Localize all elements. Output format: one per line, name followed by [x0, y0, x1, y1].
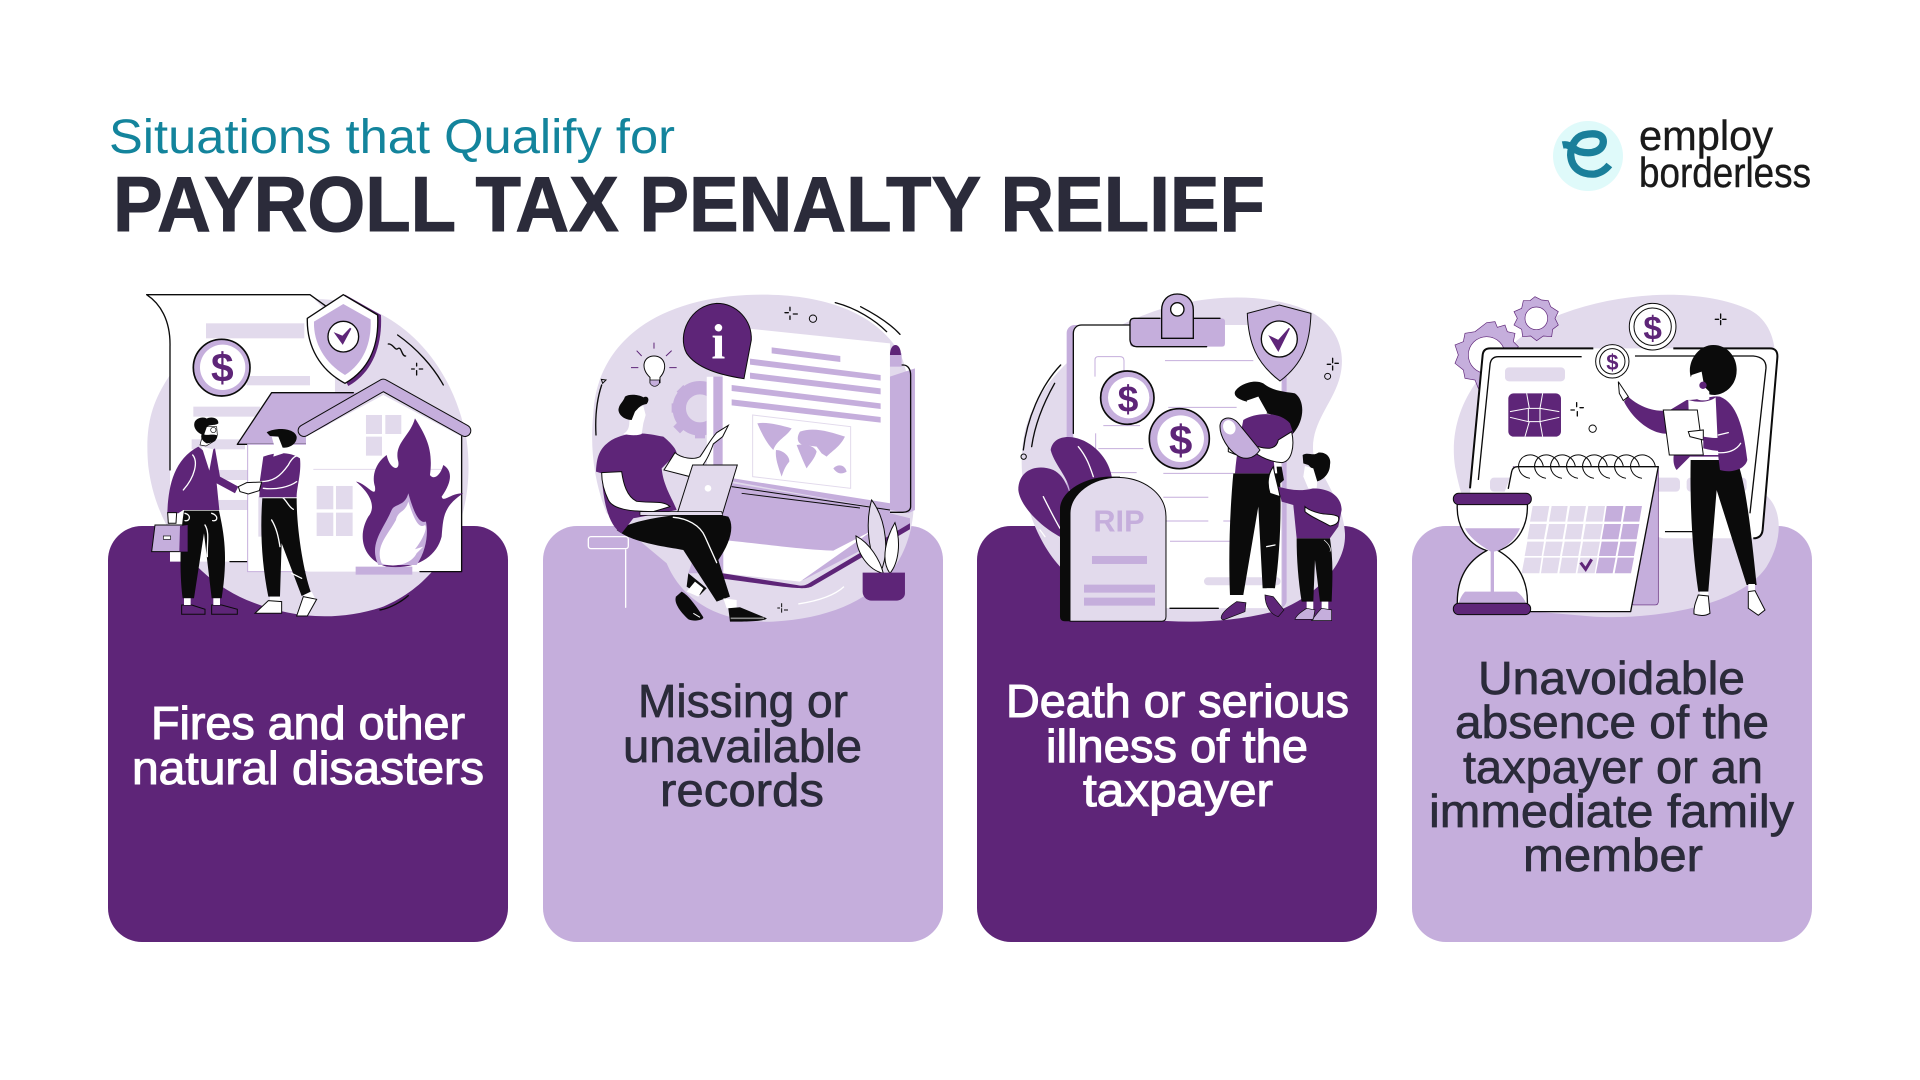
lightbulb [631, 343, 677, 386]
panel: death or serious illness [977, 294, 1377, 942]
card text: taxpayer [1083, 764, 1273, 816]
card text: immediate family [1429, 785, 1794, 837]
card text: taxpayer or an [1463, 741, 1763, 793]
house [237, 385, 465, 572]
illustration: person with laptop and document [588, 295, 915, 622]
woman [1220, 382, 1302, 620]
card background [977, 526, 1377, 942]
gears [1455, 297, 1558, 388]
card text: unavailable [623, 720, 862, 772]
marker pin [890, 345, 902, 367]
screen [688, 327, 915, 588]
plant [856, 500, 905, 601]
person [596, 395, 767, 622]
tombstone: RIP [1093, 505, 1145, 539]
illustration: tablet, calendar, hourglass and woman [1453, 295, 1779, 617]
tablet [1470, 348, 1777, 538]
title: PAYROLL TAX PENALTY RELIEF [113, 160, 1265, 248]
panel: missing or unavailable records [543, 295, 943, 942]
logo wordmark: employ [1639, 112, 1773, 159]
card text [623, 675, 862, 816]
coins: $ [1643, 310, 1662, 347]
coin: $ [211, 345, 234, 391]
card text: Death or serious [1006, 675, 1349, 727]
coins: $ [1118, 378, 1139, 420]
tombstone [1060, 477, 1166, 621]
woman [1618, 345, 1765, 615]
card background [1412, 526, 1812, 942]
card text: illness of the [1046, 720, 1308, 772]
clipboard [1067, 294, 1287, 608]
flame [356, 418, 463, 575]
card text: natural disasters [132, 742, 484, 794]
card background [108, 526, 508, 942]
calendar [1483, 455, 1658, 612]
panel: unavoidable absence [1412, 295, 1812, 942]
card text: Missing or [638, 675, 848, 727]
woman [238, 429, 317, 616]
illustration: clipboard, tombstone and family [1018, 294, 1345, 622]
panel: fires and natural disasters [108, 295, 508, 942]
coin [193, 339, 250, 396]
card text [132, 697, 484, 794]
info bubble [683, 303, 751, 379]
hourglass [1453, 493, 1531, 615]
coins [1596, 303, 1676, 378]
card text [1006, 675, 1349, 816]
logo [1553, 112, 1811, 196]
leaves [1018, 437, 1113, 540]
chip [1508, 393, 1561, 437]
gear [672, 382, 721, 438]
shield [1247, 305, 1311, 381]
coins: $ [1606, 350, 1618, 375]
coins: $ [1169, 416, 1192, 463]
card text: Fires and other [151, 697, 465, 749]
child [1268, 453, 1342, 621]
subtitle: Situations that Qualify for [109, 111, 675, 164]
world map [757, 423, 847, 477]
card background [543, 526, 943, 942]
card text: Unavoidable [1478, 652, 1745, 704]
card text: records [660, 764, 824, 816]
info bubble: i [711, 313, 725, 369]
logo mark [1553, 121, 1623, 191]
logo wordmark line 2: borderless [1639, 149, 1811, 196]
coins [1101, 371, 1209, 469]
stool [588, 537, 628, 607]
man with briefcase [152, 418, 238, 614]
shield [307, 295, 381, 386]
card text: absence of the [1455, 696, 1769, 748]
card text [1429, 652, 1794, 881]
laptop [640, 465, 737, 515]
illustration: house on fire and handshake [147, 295, 469, 616]
card text: member [1523, 829, 1703, 881]
